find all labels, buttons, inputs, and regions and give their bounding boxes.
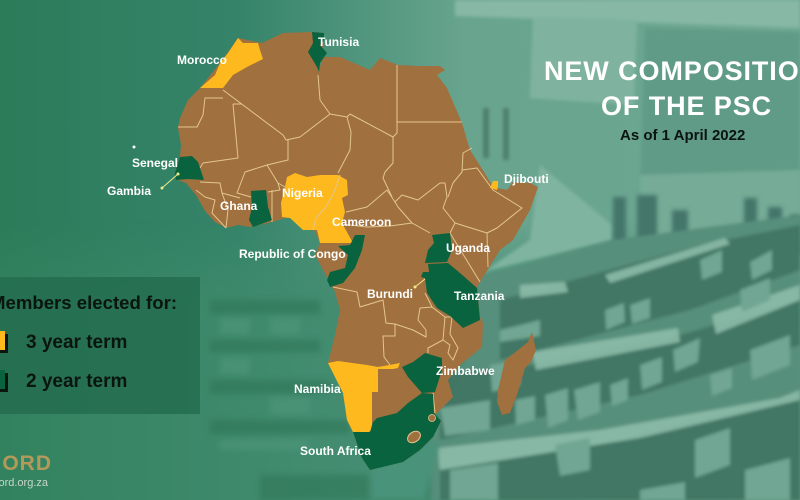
legend item: 3 year term: 3 year term (26, 332, 127, 353)
label: Zimbabwe: Zimbabwe (436, 364, 495, 378)
green: Uganda (425, 233, 452, 263)
yellow: Djibouti (490, 181, 498, 190)
green: Tanzania and Burundi (421, 263, 480, 328)
label: Nigeria: Nigeria (282, 186, 323, 200)
Madagascar (497, 332, 536, 415)
panel: legend (0, 277, 200, 414)
yellow: Morocco (200, 38, 263, 88)
country labels (107, 35, 549, 458)
country borders (178, 65, 522, 413)
yellow: Namibia (328, 361, 400, 433)
green: Zimbabwe (402, 353, 442, 393)
label: South Africa: South Africa (300, 444, 371, 458)
label: Ghana: Ghana (220, 199, 257, 213)
subtitle: As of 1 April 2022 (620, 127, 745, 144)
label: Gambia: Gambia (107, 184, 151, 198)
label: Senegal: Senegal (132, 156, 178, 170)
mainland Africa (175, 32, 538, 470)
label: Burundi: Burundi (367, 287, 413, 301)
logo: ACCORD (0, 452, 52, 489)
label: Djibouti: Djibouti (504, 172, 549, 186)
label: Cameroon: Cameroon (332, 215, 391, 229)
label: Tunisia: Tunisia (318, 35, 359, 49)
label: Morocco: Morocco (177, 53, 227, 67)
logo: ACCORD: ORD (2, 452, 52, 475)
pointer: Gambia (161, 173, 179, 189)
label: Republic of Congo: Republic of Congo (239, 247, 346, 261)
yellow: Nigeria and Cameroon (281, 173, 353, 243)
label: Tanzania: Tanzania (454, 289, 504, 303)
label: Uganda: Uganda (446, 241, 490, 255)
green: Republic of Congo (327, 235, 365, 287)
pointer: Burundi (414, 279, 425, 288)
green: Ghana (249, 190, 272, 227)
title (544, 56, 800, 120)
green: South Africa (353, 393, 441, 470)
green: Senegal (175, 156, 204, 180)
legend item: 2 year term: 2 year term (26, 371, 127, 392)
Cabo Verde dot (132, 146, 136, 148)
label: Namibia: Namibia (294, 382, 341, 396)
green: Tunisia (308, 32, 327, 72)
hall seating (430, 215, 800, 500)
